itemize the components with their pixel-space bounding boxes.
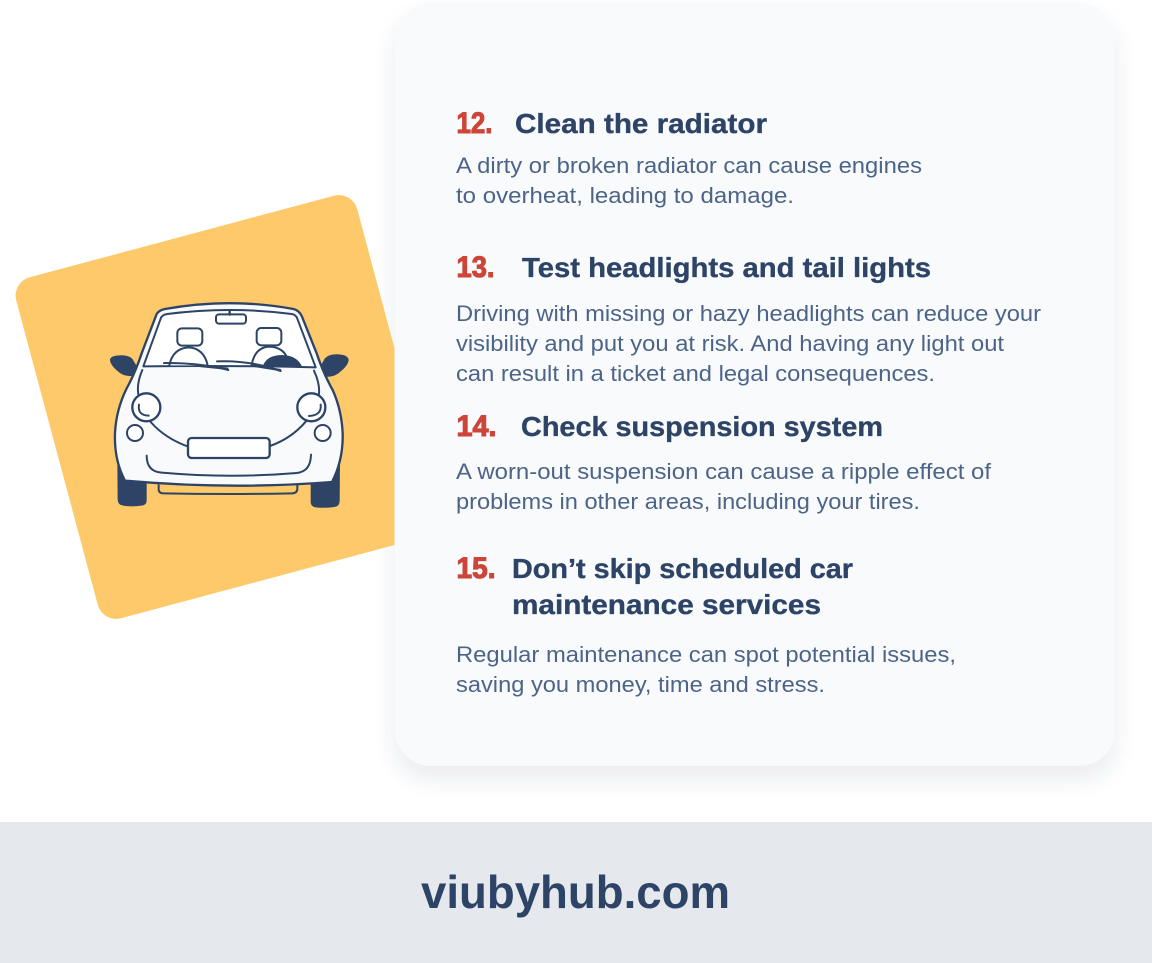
number 13: 13.: [456, 251, 494, 284]
tip 13: [456, 251, 1041, 386]
icon: lower bumper: [159, 485, 297, 494]
body text: [456, 301, 1041, 386]
icon: left headlight: [132, 393, 160, 421]
icon: car body: [115, 303, 343, 486]
icon: wipers: [164, 361, 281, 371]
body text: Driving with missing or hazy headlights can reduce your: [456, 301, 1041, 326]
heading: check suspension: Check suspension system: [521, 411, 883, 442]
icon: tires: [117, 460, 340, 508]
body text: A worn-out suspension can cause a ripple effect of: [456, 459, 992, 484]
heading: scheduled maintenance: Don’t skip scheduled car: [512, 553, 853, 584]
body text: saving you money, time and stress.: [456, 672, 825, 697]
icon: windshield: [143, 310, 316, 367]
number 15: 15.: [456, 552, 496, 585]
heading: clean the radiator: Clean the radiator: [515, 108, 767, 139]
tip 12: [456, 107, 922, 208]
icon: right headlight: [297, 393, 325, 421]
heading: scheduled maintenance: maintenance services: [512, 589, 821, 620]
heading: scheduled maintenance: [512, 553, 853, 620]
body text: can result in a ticket and legal consequences.: [456, 361, 935, 386]
body text: [456, 153, 922, 208]
body text: Regular maintenance can spot potential issues,: [456, 642, 956, 667]
icon: right seat: [252, 328, 287, 365]
icon: steering wheel: [263, 355, 302, 367]
icon: hood lines: [138, 370, 319, 447]
icon: fog lights: [127, 425, 331, 441]
body text: visibility and put you at risk. And having any light out: [456, 331, 1004, 356]
panel: tips card: [395, 3, 1115, 766]
footer band: [0, 822, 1152, 963]
tip 14: [456, 410, 992, 514]
icon: license plate: [188, 438, 270, 458]
icon: side mirrors: [110, 354, 349, 377]
tip 15: [456, 552, 956, 697]
icon: rearview mirror: [216, 311, 246, 324]
number 12: 12.: [456, 107, 492, 140]
body text: [456, 459, 992, 514]
body text: [456, 642, 956, 697]
icon: car front view: [110, 303, 349, 508]
icon: left seat: [169, 328, 208, 365]
number 14: 14.: [456, 410, 496, 443]
heading: test headlights: Test headlights and tail lights: [522, 252, 931, 283]
panel: yellow rotated square: [16, 195, 394, 619]
icon: grille smile line: [147, 455, 311, 476]
footer website text: viubyhub.com: [421, 866, 730, 918]
body text: problems in other areas, including your tires.: [456, 489, 920, 514]
body text: A dirty or broken radiator can cause engines: [456, 153, 922, 178]
body text: to overheat, leading to damage.: [456, 183, 794, 208]
